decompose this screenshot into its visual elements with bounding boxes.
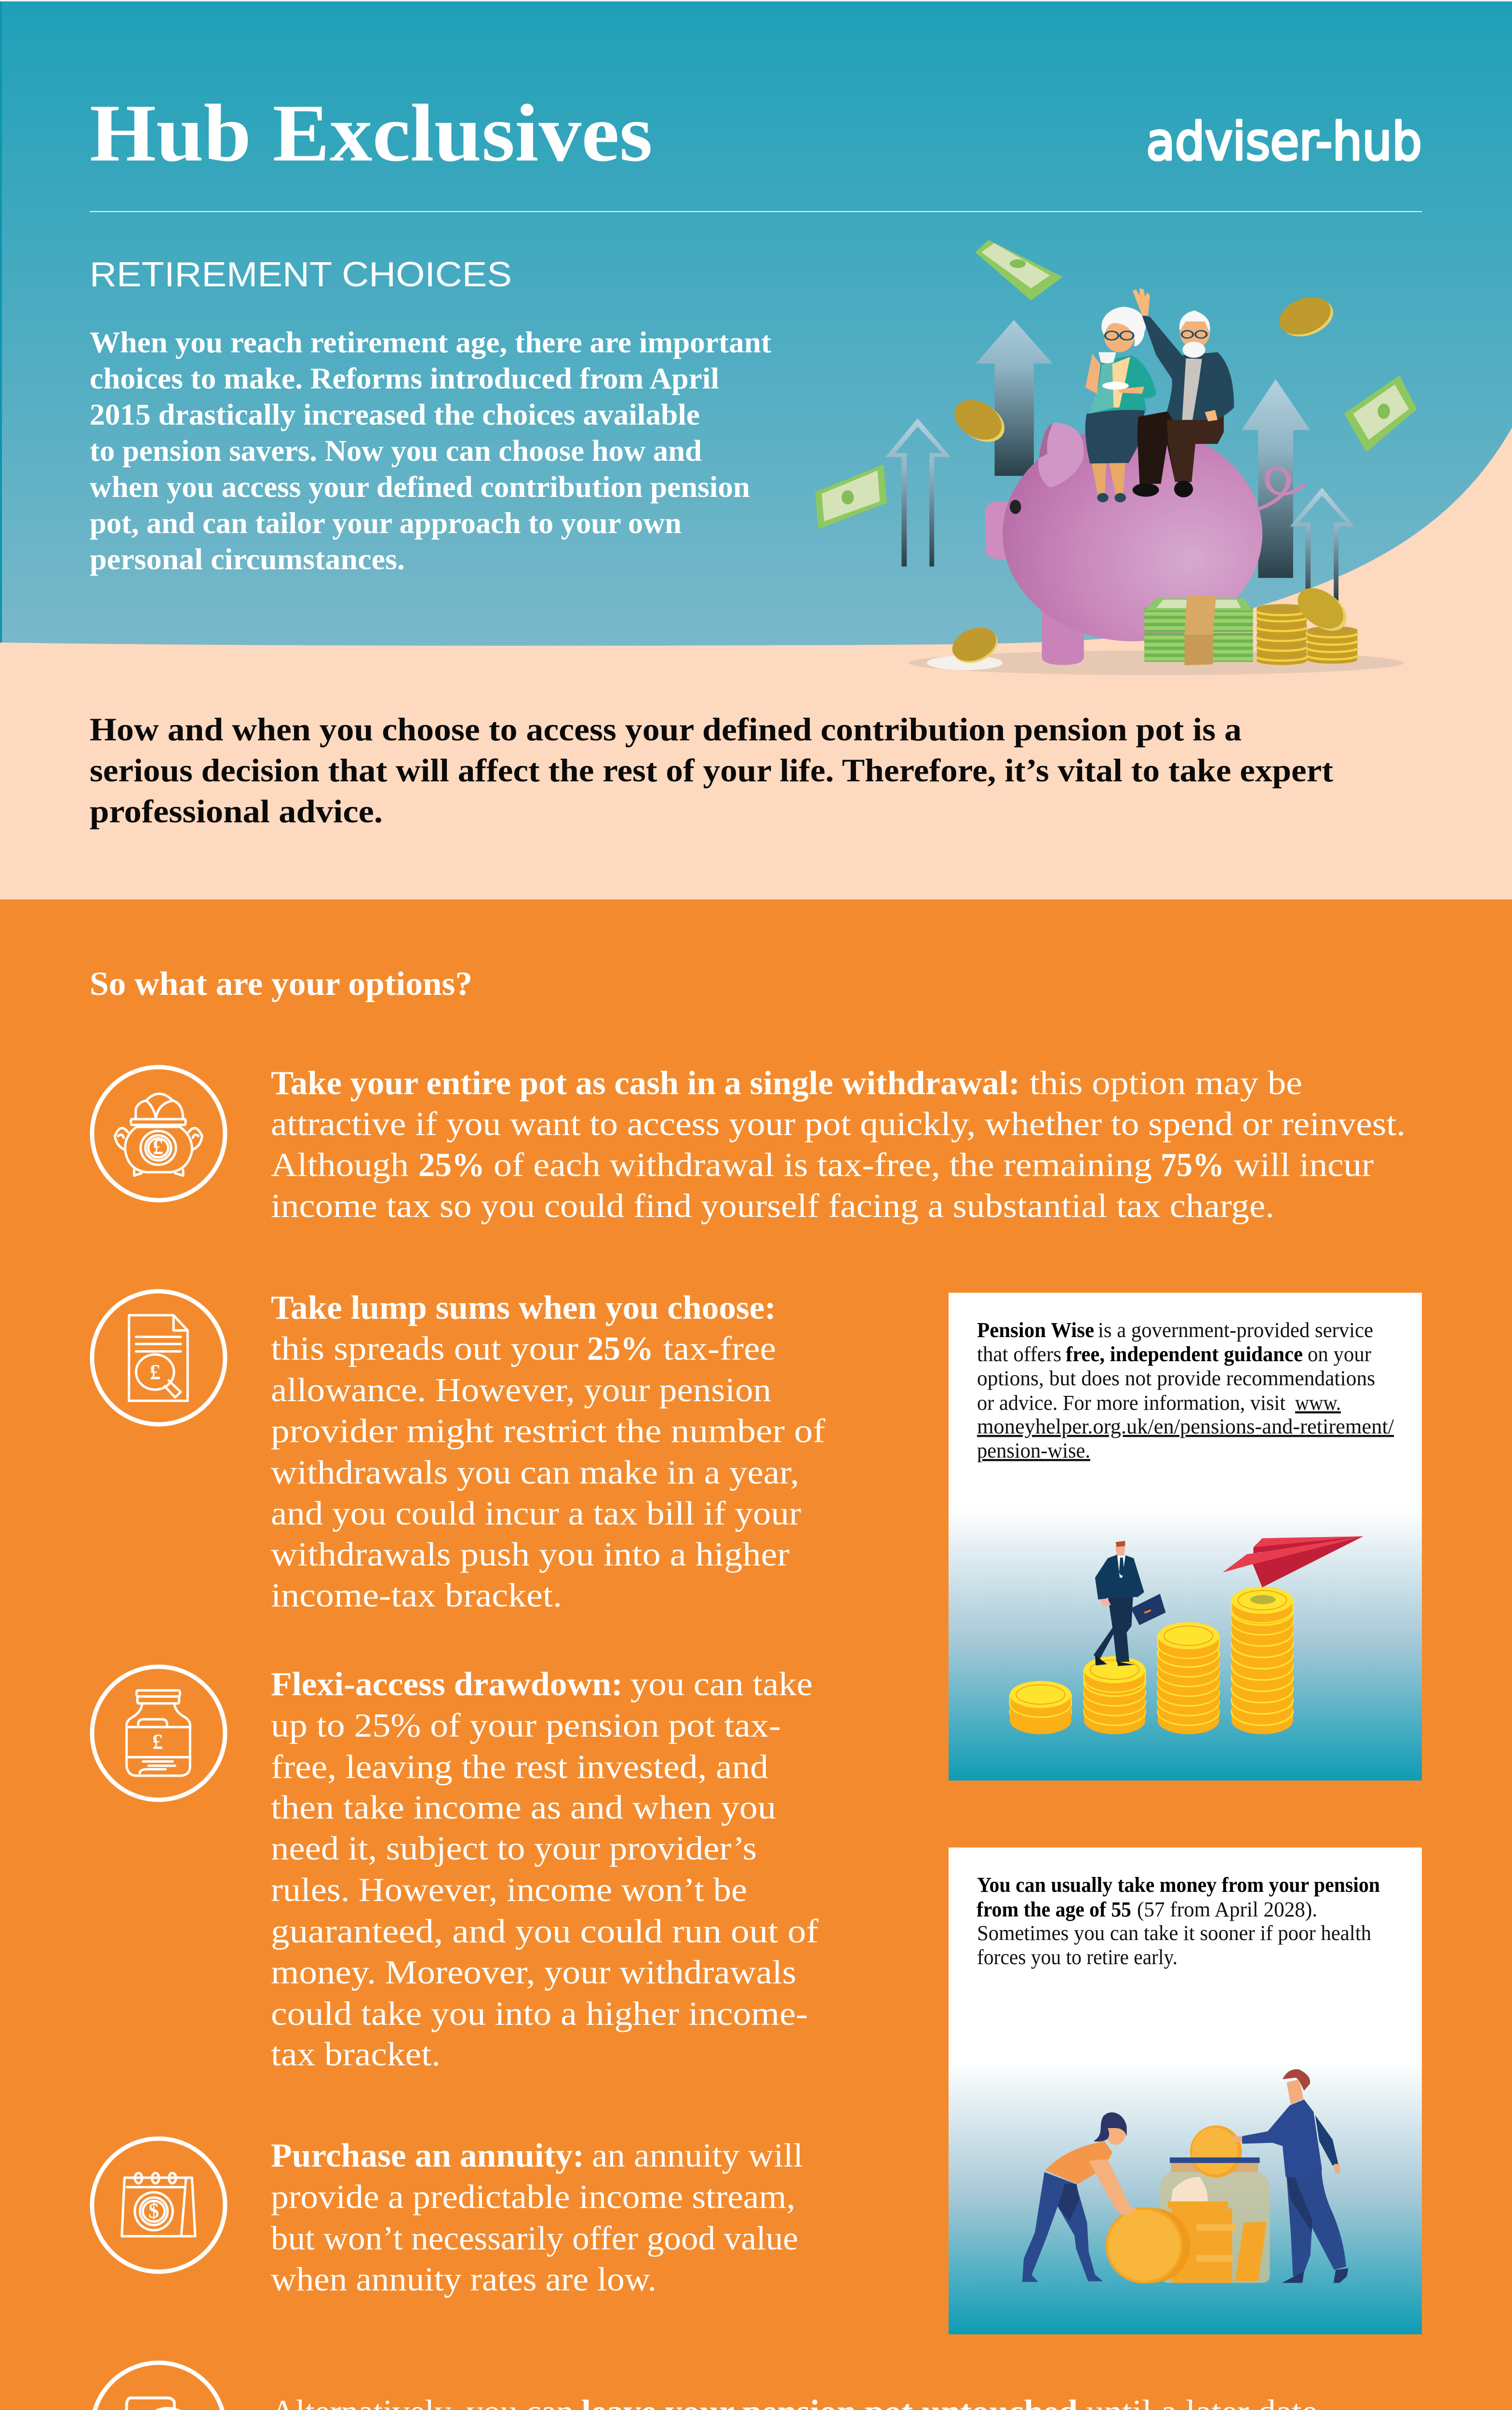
card text: options, but does not provide recommendations [977, 1366, 1375, 1390]
icon: coin stack one [1010, 1681, 1071, 1734]
section heading: So what are your options? [90, 965, 472, 1003]
icon: calendar with coin: $ [148, 2199, 159, 2223]
text block: Although [271, 1147, 409, 1184]
icon: outline arrow left [885, 418, 950, 566]
text block: money. Moreover, your withdrawals [271, 1954, 796, 1991]
text block: you can take [630, 1666, 813, 1703]
text block: could take you into a higher income- [271, 1995, 808, 2033]
icon: retired man [1133, 288, 1234, 497]
text block: Flexi-access drawdown: [271, 1666, 623, 1703]
text block: but won’t necessarily offer good value [271, 2220, 798, 2257]
text block: this spreads out your [271, 1330, 578, 1367]
icon: banknote left [815, 465, 887, 529]
icon: pot of coins [92, 1067, 225, 1200]
card text [977, 1873, 1380, 1969]
illustration: piggy bank with retired couple [815, 240, 1417, 675]
key message on cream band [90, 711, 1333, 830]
text block: provider might restrict the number of [271, 1413, 826, 1450]
icon: banknote top [975, 240, 1063, 301]
card text: or advice. For more information, visit [977, 1391, 1285, 1415]
icon: calendar with coin [92, 2139, 225, 2272]
icon: floating gold coins [943, 291, 1344, 668]
text block: guaranteed, and you could run out of [271, 1913, 819, 1950]
text block: income tax so you could find yourself facing a substantial tax charge. [271, 1188, 1274, 1225]
text block: tax bracket. [271, 2036, 441, 2073]
card text: (57 from April 2028). [1137, 1898, 1317, 1921]
icon: large arrow left [976, 320, 1053, 476]
text block [271, 2394, 1326, 2410]
text block: withdrawals you can make in a year, [271, 1454, 799, 1491]
illustration: couple filling a coin jar [1022, 2069, 1349, 2283]
icon: jar [92, 1667, 225, 1800]
icon: jar: £ [152, 1730, 163, 1754]
text block: then take income as and when you [271, 1789, 776, 1826]
card text: Pension Wise [977, 1318, 1094, 1342]
icon: coins with up arrow [92, 2363, 225, 2410]
logo: adviser-hub: adviser-hub [1146, 112, 1422, 172]
icon: document with magnifier [92, 1291, 225, 1424]
header divider [90, 211, 1422, 212]
text block: need it, subject to your provider’s [271, 1830, 757, 1867]
intro paragraph: choices to make. Reforms introduced from April [90, 362, 719, 395]
icon: man dropping coin [1230, 2069, 1349, 2283]
option 2: lump sums [92, 1289, 826, 1614]
intro paragraph: When you reach retirement age, there are important [90, 326, 771, 359]
icon: pot of coins: £ [153, 1135, 163, 1159]
panel: cream intro band [0, 428, 1512, 899]
card text: www. [1295, 1391, 1341, 1415]
card text: pension-wise. [977, 1439, 1090, 1462]
card text: forces you to retire early. [977, 1945, 1177, 1969]
intro paragraph [90, 326, 771, 576]
option 1: entire pot as cash [92, 1065, 1405, 1225]
panel: teal header [0, 0, 1512, 648]
icon: woman pushing coin [1022, 2112, 1138, 2282]
intro paragraph: 2015 drastically increased the choices available [90, 399, 700, 431]
text block: attractive if you want to access your pot quickly, whether to spend or reinvest. [271, 1106, 1405, 1143]
text block: 75% [1161, 1147, 1224, 1184]
icon: red paper plane [1223, 1536, 1363, 1587]
text block: Take your entire pot as cash in a single withdrawal: [271, 1065, 1020, 1102]
option 4: annuity [92, 2137, 803, 2298]
subheading: RETIREMENT CHOICES [90, 255, 512, 294]
key message on cream band: serious decision that will affect the rest of your life. Therefore, it’s vital to take expert [90, 752, 1333, 789]
intro paragraph: personal circumstances. [90, 543, 405, 576]
intro paragraph: when you access your defined contribution pension [90, 471, 750, 504]
icon: retired woman [1085, 307, 1156, 502]
title: Hub Exclusives [90, 88, 653, 178]
text block: tax-free [663, 1330, 776, 1367]
panel: Pension Wise card [949, 1293, 1422, 1781]
card text: that offers [977, 1342, 1061, 1366]
text block: provide a predictable income stream, [271, 2179, 795, 2216]
text block: Purchase an annuity: [271, 2137, 584, 2174]
intro paragraph: pot, and can tailor your approach to your own [90, 507, 682, 540]
icon: coin jar [1160, 2126, 1270, 2283]
card text: from the age of 55 [977, 1898, 1131, 1921]
icon: coin stack four [1231, 1587, 1293, 1734]
text block: 25% [418, 1147, 485, 1184]
text block [271, 2137, 803, 2298]
text block: Take lump sums when you choose: [271, 1289, 776, 1326]
key message on cream band: How and when you choose to access your defined contribution pension pot is a [90, 711, 1242, 748]
icon: large coin [1107, 2208, 1191, 2283]
text block: income-tax bracket. [271, 1577, 562, 1614]
text block: this option may be [1030, 1065, 1302, 1102]
icon: businessman [1094, 1541, 1165, 1666]
card text: Sometimes you can take it sooner if poor health [977, 1921, 1371, 1945]
text block [271, 1289, 826, 1614]
ground shadow [908, 651, 1404, 675]
icon: document with magnifier: £ [150, 1360, 161, 1384]
text block: of each withdrawal is tax-free, the remaining [494, 1147, 1152, 1184]
text block: and you could incur a tax bill if your [271, 1495, 801, 1532]
text block: allowance. However, your pension [271, 1372, 771, 1409]
key message on cream band: professional advice. [90, 793, 383, 830]
text block: when annuity rates are low. [271, 2261, 656, 2298]
card text: You can usually take money from your pension [977, 1873, 1380, 1897]
card text: moneyhelper.org.uk/en/pensions-and-retirement/ [977, 1415, 1394, 1438]
text block: will incur [1234, 1147, 1374, 1184]
icon: gold coin stacks [1257, 583, 1357, 665]
card text: on your [1308, 1342, 1371, 1366]
card text: free, independent guidance [1066, 1342, 1303, 1366]
icon: banknote right [1344, 375, 1417, 452]
text block: an annuity will [592, 2137, 803, 2174]
option 3: flexi-access drawdown [92, 1666, 819, 2073]
text block: free, leaving the rest invested, and [271, 1749, 768, 1786]
icon: coin stack three [1158, 1622, 1219, 1734]
icon: piggy bank [985, 423, 1305, 665]
icon: outline arrow right [1290, 487, 1354, 602]
card text: is a government-provided service [1098, 1318, 1373, 1342]
icon: stack of banknotes [1144, 596, 1253, 665]
icon: large arrow right [1242, 379, 1310, 578]
intro paragraph: to pension savers. Now you can choose how and [90, 435, 702, 468]
illustration: businessman on coin stacks with paper plane [1010, 1536, 1363, 1734]
text block [271, 1666, 819, 2073]
option 5: leave untouched [92, 2363, 1326, 2410]
text block: rules. However, income won’t be [271, 1872, 747, 1909]
text block: withdrawals push you into a higher [271, 1536, 789, 1573]
panel: age 55 card [949, 1848, 1422, 2334]
card text [977, 1318, 1394, 1462]
icon: coin stack two [1084, 1656, 1145, 1734]
text block: up to 25% of your pension pot tax- [271, 1707, 781, 1744]
text block [271, 1065, 1405, 1225]
text block: 25% [587, 1330, 654, 1367]
